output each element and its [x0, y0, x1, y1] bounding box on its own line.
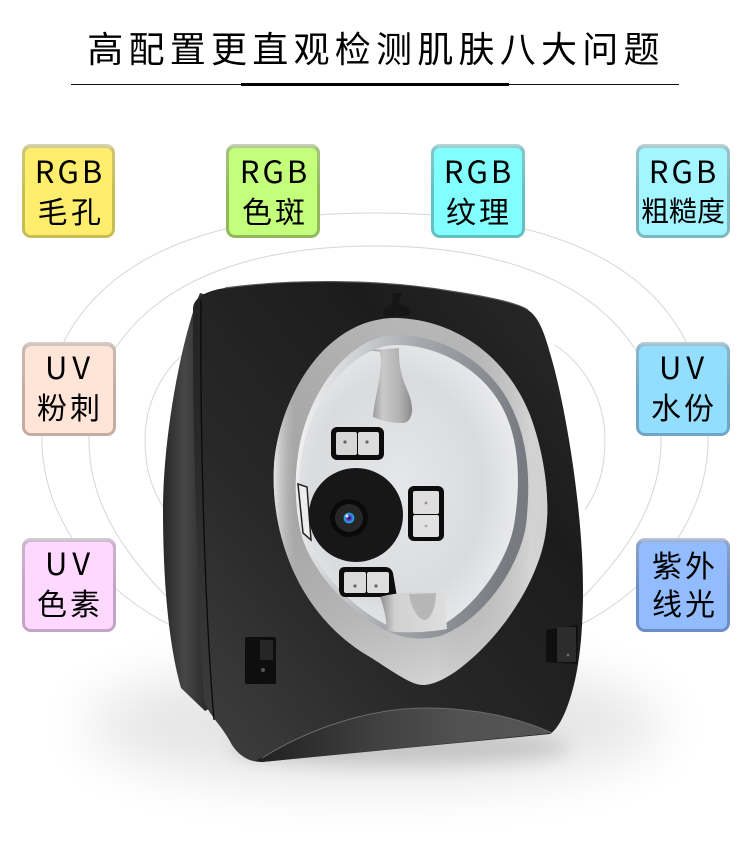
tag: UV 水份: 水份 — [651, 384, 717, 428]
device — [163, 282, 583, 762]
tag: RGB 色斑: 色斑 — [242, 188, 308, 232]
top LED module — [331, 427, 384, 460]
tag: UV 水份 — [636, 342, 730, 436]
tag: RGB 纹理: 纹理 — [446, 188, 512, 232]
ring inner bevel — [296, 335, 528, 638]
tag: RGB 粗糙度 — [636, 144, 730, 238]
tag: 紫外线光: 线光 — [652, 580, 718, 624]
tag: RGB 毛孔: 毛孔 — [38, 188, 104, 232]
tag: UV 粉刺 — [22, 342, 116, 436]
device front body — [193, 282, 583, 762]
tag: RGB 纹理: RGB — [444, 147, 514, 192]
tag: RGB 粗糙度: RGB — [649, 147, 719, 192]
tag: UV 色素: 色素 — [37, 580, 103, 624]
top hook — [370, 348, 412, 423]
tag: UV 粉刺: UV — [45, 343, 95, 388]
seam — [201, 300, 214, 720]
title underline — [71, 83, 679, 86]
device back housing — [163, 293, 225, 711]
tag: RGB 色斑: RGB — [240, 147, 310, 192]
device bottom wedge — [255, 708, 552, 762]
floor shadow — [85, 665, 665, 785]
left clip — [298, 484, 311, 540]
camera lens — [330, 499, 368, 537]
tag: UV 色素 — [22, 538, 116, 632]
tag: 紫外线光: 紫外 — [652, 542, 718, 586]
right LED module — [408, 486, 444, 541]
tag: RGB 粗糙度: 粗糙度 — [641, 190, 725, 230]
concentric rings — [42, 213, 708, 625]
tag: UV 粉刺: 粉刺 — [37, 384, 103, 428]
tag: UV 色素: UV — [45, 539, 95, 584]
tag: 紫外线光 — [636, 538, 730, 632]
tag: RGB 纹理 — [431, 144, 525, 238]
top sensor — [383, 293, 410, 317]
tag: RGB 毛孔 — [22, 144, 115, 238]
bottom bracket — [380, 592, 447, 632]
bottom LED module — [339, 567, 397, 597]
silver ring — [274, 318, 547, 685]
left side clip — [245, 637, 276, 684]
tag: RGB 色斑 — [226, 144, 320, 238]
title: 高配置更直观检测肌肤八大问题 — [87, 21, 665, 73]
tag: UV 水份: UV — [659, 343, 709, 388]
camera disc — [309, 468, 403, 562]
right side clip — [546, 625, 578, 664]
inner face — [299, 345, 518, 632]
tag: RGB 毛孔: RGB — [35, 147, 105, 192]
